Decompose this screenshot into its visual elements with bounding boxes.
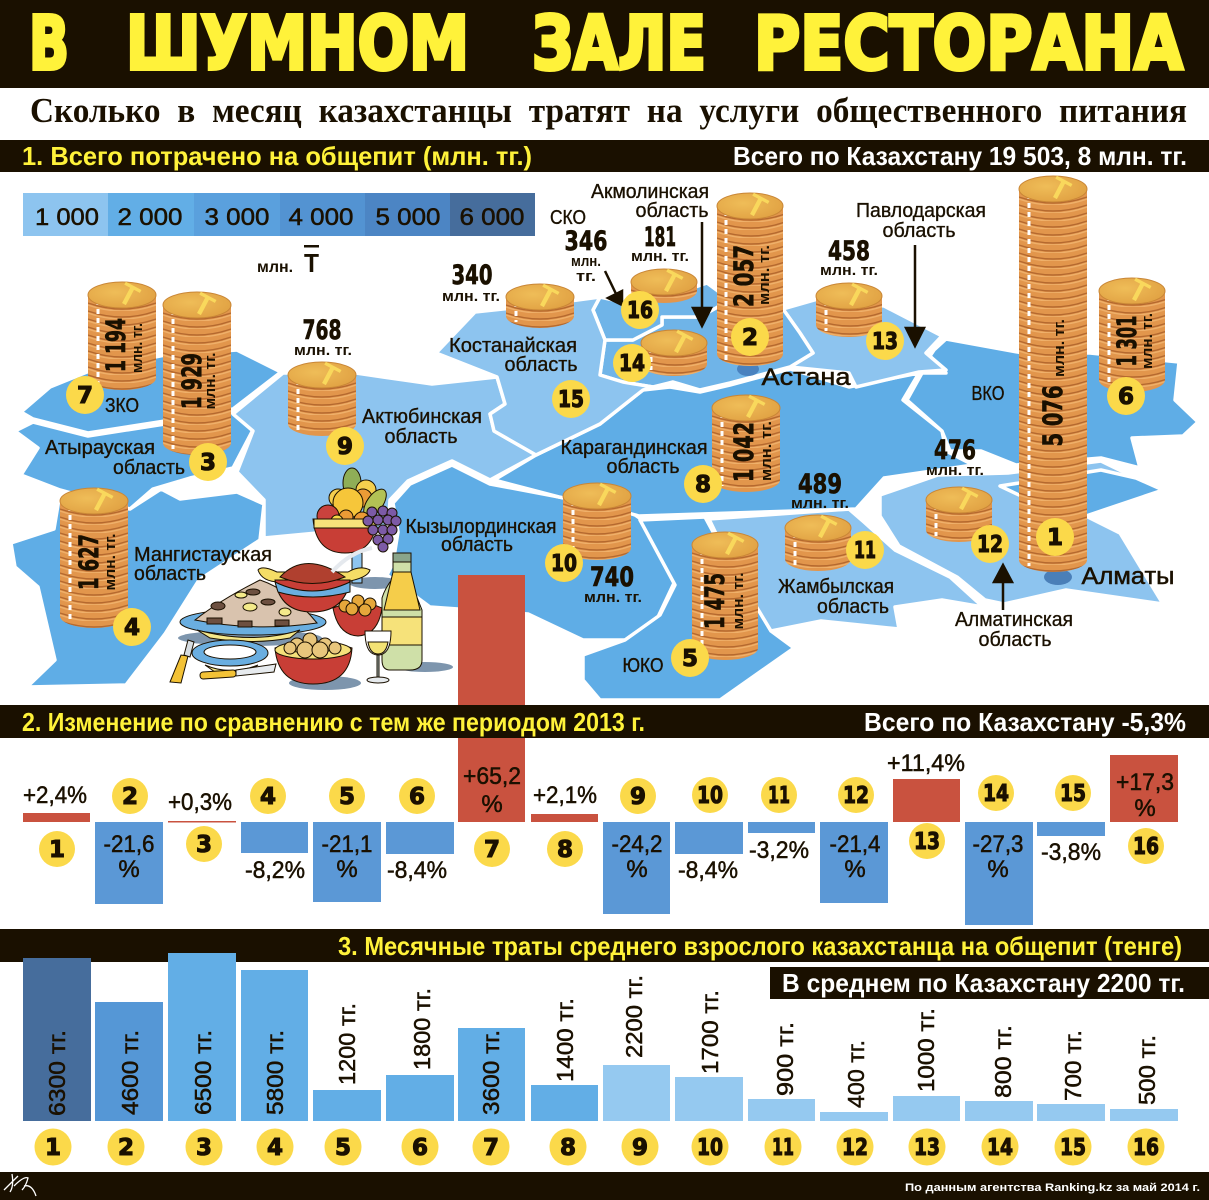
change bar chart: -24,2 (612, 831, 662, 858)
map value labels: млн. (571, 253, 601, 270)
coin stack 5 (692, 527, 758, 660)
region names: область (636, 200, 708, 222)
spending bar chart: 1800 тг. (409, 988, 435, 1070)
change bar chart: 16 (1133, 834, 1159, 860)
coin stack 6: 1 301 (1112, 315, 1143, 367)
coin stack 2: млн. тг. (756, 245, 773, 305)
coin stack 8 (712, 390, 780, 492)
coin stack 4 (60, 483, 128, 628)
spending bar chart: 6500 тг. (190, 1030, 216, 1115)
change bar chart: -8,2% (245, 857, 305, 884)
spending bar chart: 5800 тг. (262, 1030, 288, 1115)
legend scale: 6 000 (460, 204, 524, 231)
change bar chart: 10 (697, 783, 723, 809)
region names: Алматинская (955, 609, 1073, 631)
map number badges: 11 (854, 538, 876, 564)
change bar chart: 6 (409, 784, 425, 810)
bar 7 extension above section 2 band (458, 575, 525, 707)
section 1 heading: 1. Всего потрачено на общепит (млн. тг.) (22, 141, 532, 171)
map value labels: 768 (302, 315, 342, 346)
map number badges: 7 (77, 383, 93, 409)
coin stack 7: Т (113, 277, 144, 314)
section 1 total: Всего по Казахстану 19 503, 8 млн. тг. (733, 141, 1187, 171)
region names: Актюбинская (362, 406, 482, 428)
change bar chart: 13 (914, 829, 940, 855)
map number badges: 16 (627, 298, 653, 324)
map number badges: 8 (695, 472, 711, 498)
map value labels: млн. тг. (926, 462, 984, 479)
coin stack 7 (88, 277, 156, 390)
map number badges: 15 (558, 387, 584, 413)
coin stack 13 (816, 278, 882, 337)
map value labels: 346 (564, 226, 608, 257)
map number badges: 6 (1118, 384, 1134, 410)
coin stack 1: млн. тг. (1051, 319, 1068, 377)
change bar chart: -21,4 (830, 831, 880, 858)
change bar chart: % (118, 856, 140, 883)
spending bar chart: 800 тг. (990, 1025, 1016, 1098)
coin stack 1: Т (1044, 171, 1075, 208)
map value labels: тг. (576, 268, 596, 285)
arrow: Pavlodar region (906, 245, 924, 346)
spending bar chart: 900 тг. (772, 1022, 798, 1096)
region names: область (882, 220, 956, 242)
coin stack 6: млн. тг. (1139, 313, 1156, 369)
change bar chart: +2,1% (533, 782, 597, 809)
section 3 number badges: 16 (1133, 1135, 1159, 1161)
section 3 number badges: 8 (560, 1135, 576, 1161)
coin stack 11: Т (809, 510, 840, 547)
coin stack 9 (288, 357, 356, 436)
region names: Мангистауская (134, 544, 272, 566)
change bar chart: -27,3 (972, 831, 1024, 858)
map number badges: 3 (200, 450, 216, 476)
change bar chart: 1 (49, 837, 65, 863)
section 3 number badges: 10 (697, 1135, 723, 1161)
coin stack 14: Т (665, 325, 696, 362)
map number badges: 5 (682, 646, 698, 672)
title: В (29, 1, 69, 87)
change bar chart: 15 (1060, 781, 1086, 807)
region names: область (504, 354, 578, 376)
section 3 number badges: 2 (118, 1135, 134, 1161)
change bar chart: % (626, 856, 648, 883)
section 3 number badges: 14 (987, 1135, 1013, 1161)
section 3 number badges: 9 (632, 1135, 648, 1161)
map number badges (66, 291, 1145, 677)
map number badges: 2 (742, 325, 758, 351)
change bar chart: 8 (557, 837, 573, 863)
coin stack 4: млн. тг. (102, 534, 119, 590)
coin stack 13: Т (840, 278, 871, 315)
coin stack 6 (1099, 273, 1165, 392)
map number badges: 14 (619, 351, 645, 377)
region names: область (978, 629, 1052, 651)
change bar chart (23, 738, 1178, 925)
change bar chart: 9 (630, 784, 646, 810)
change bar chart: -21,1 (322, 831, 372, 858)
coin stack 14 (641, 325, 707, 376)
change bar chart: 4 (260, 784, 276, 810)
change bar chart: % (987, 856, 1009, 883)
region names: область (606, 456, 680, 478)
map value labels: млн. тг. (820, 262, 878, 279)
coin stack 16 (631, 264, 697, 303)
coin stack 2: 2 057 (729, 245, 760, 307)
spending bar chart: 500 тг. (1134, 1035, 1160, 1105)
section 3 number badges: 7 (483, 1135, 499, 1161)
region names: СКО (550, 207, 586, 229)
change bar chart: -8,4% (678, 857, 738, 884)
change bar chart: -8,4% (387, 857, 447, 884)
change bar chart: % (844, 856, 866, 883)
region names: Алматы (1082, 563, 1174, 590)
coin stack 5: 1 475 (700, 573, 731, 629)
map of Kazakhstan (11, 283, 1198, 700)
coin stack 12: Т (950, 482, 981, 519)
legend unit (257, 245, 319, 278)
coin stack 6: Т (1123, 273, 1154, 310)
map number badges: 12 (977, 532, 1003, 558)
section 3 number badges: 3 (196, 1135, 212, 1161)
title band (0, 0, 1209, 88)
coin stack 4: Т (85, 483, 116, 520)
map number badges: 1 (1047, 525, 1063, 551)
illustration: food (170, 468, 453, 690)
region names (45, 181, 1174, 677)
Astana marker (737, 362, 759, 376)
section 3 number badges: 12 (842, 1135, 868, 1161)
change bar chart: 3 (196, 832, 212, 858)
title: ЗАЛЕ (532, 1, 706, 87)
section 3 number badges: 15 (1060, 1135, 1086, 1161)
region names: Атырауская (45, 437, 155, 459)
change bar chart: -3,2% (749, 837, 809, 864)
coin stack 3 (163, 287, 231, 455)
legend unit: Т (304, 248, 319, 278)
source note: По данным агентства Ranking.kz за май 2014 г. (905, 1182, 1200, 1194)
section 3 number badges: 13 (914, 1135, 940, 1161)
coin stack 7: 1 194 (101, 318, 132, 372)
section 3 number badges: 11 (772, 1135, 794, 1161)
coin stack 10 (563, 478, 631, 560)
map value labels: млн. тг. (442, 288, 500, 305)
coin stack 11 (785, 510, 851, 571)
coin stack 2: Т (741, 188, 772, 225)
spending bar chart: 3600 тг. (478, 1030, 504, 1115)
legend scale: 5 000 (376, 204, 440, 231)
region names: Карагандинская (560, 437, 708, 459)
region names: Жамбылская (778, 576, 894, 598)
map value labels: млн. тг. (584, 589, 642, 606)
coin stack 8: млн. тг. (758, 421, 775, 481)
section 3 number badges: 4 (267, 1135, 283, 1161)
coin stack 8: 1 042 (729, 422, 760, 482)
region names: область (817, 596, 889, 618)
spending bar chart: 2200 тг. (621, 975, 647, 1058)
section 1 header band (0, 140, 1209, 172)
coin stack 3: Т (188, 287, 219, 324)
change bar chart: +17,3 (1116, 769, 1174, 796)
change bar chart: % (481, 791, 503, 818)
region names: Акмолинская (591, 181, 709, 203)
change bar chart: 5 (339, 784, 355, 810)
coin stack 3: млн. тг. (202, 352, 219, 410)
region names: ЗКО (105, 395, 139, 417)
legend scale: 3 000 (204, 204, 270, 231)
region names: Костанайская (449, 335, 577, 357)
map value labels (294, 222, 984, 606)
coin stack 10: Т (588, 478, 619, 515)
section 3 number badges (34, 1128, 1164, 1166)
spending bar chart: 1200 тг. (334, 1003, 360, 1085)
spending bar chart (23, 953, 1178, 1121)
legend scale: 2 000 (118, 204, 182, 231)
change bar chart: 2 (122, 784, 138, 810)
legend scale: 4 000 (288, 204, 354, 231)
arrow: Akmola region (693, 222, 711, 326)
section 3 number badges: 1 (45, 1135, 61, 1161)
region names: область (113, 457, 185, 479)
region names: область (441, 534, 513, 556)
map number badges: 9 (337, 434, 353, 460)
title: ШУМНОМ (126, 1, 469, 87)
footer band (0, 1172, 1209, 1200)
spending bar chart: 4600 тг. (117, 1030, 143, 1115)
change bar chart: +2,4% (23, 782, 87, 809)
coin stack 3: 1 929 (177, 353, 208, 409)
map value labels: 181 (644, 222, 676, 253)
change bar chart: -21,6 (104, 831, 154, 858)
region names: Кызылординская (406, 516, 556, 538)
map value labels: 476 (934, 435, 976, 466)
coin stack 15: Т (531, 279, 562, 316)
map number badges: 4 (124, 615, 140, 641)
section 2 total: Всего по Казахстану -5,3% (864, 707, 1186, 737)
legend scale: 1 000 (35, 204, 99, 231)
coin stack 1 (1019, 171, 1087, 572)
coin stack 15 (506, 279, 574, 328)
region names: Павлодарская (856, 200, 986, 222)
coin stack 8: Т (737, 390, 768, 427)
spending bar chart: 400 тг. (843, 1040, 869, 1108)
map number badges: 13 (872, 329, 898, 355)
region names: ВКО (972, 383, 1004, 405)
coin stack 5: млн. тг. (730, 572, 747, 630)
change bar chart: 11 (768, 783, 790, 809)
coin stack 9: Т (313, 357, 344, 394)
change bar chart: % (1134, 795, 1156, 822)
coin stack 1: 5 076 (1038, 386, 1069, 446)
coin stack 5: Т (716, 527, 747, 564)
map number badges: 10 (551, 551, 577, 577)
map value labels: 340 (452, 260, 492, 291)
region names: Астана (762, 364, 851, 391)
arrow: Almaty region (994, 565, 1012, 610)
region names: область (384, 426, 458, 448)
legend unit: млн. (257, 259, 293, 276)
change bar chart: -3,8% (1041, 839, 1101, 866)
section 2 header band (0, 705, 1209, 738)
map value labels: 740 (590, 562, 634, 593)
section 3 number badges: 6 (412, 1135, 428, 1161)
region names: область (134, 563, 206, 585)
artist signature (4, 1174, 36, 1196)
coin stack 16: Т (655, 264, 686, 301)
coin stack 7: млн. тг. (129, 323, 146, 373)
change bar chart: 14 (983, 781, 1009, 807)
spending bar chart: 1000 тг. (913, 1008, 939, 1092)
coin stack 12 (926, 482, 992, 542)
change bar chart: +65,2 (463, 763, 521, 790)
spending bar chart: 1700 тг. (697, 990, 723, 1074)
change bar chart: 7 (484, 837, 500, 863)
map value labels: 458 (828, 236, 870, 267)
coin stack 2 (717, 188, 783, 366)
section 3 header band (0, 929, 1209, 962)
legend scale (23, 193, 535, 236)
title (29, 1, 1183, 87)
map value labels: млн. тг. (791, 495, 849, 512)
map value labels: 489 (798, 469, 842, 500)
spending bar chart: 700 тг. (1060, 1030, 1086, 1101)
section 2 heading: 2. Изменение по сравнению с тем же периодом 2013 г. (22, 707, 645, 737)
arrow: SKO region (605, 271, 622, 305)
coin stack 4: 1 627 (74, 534, 105, 590)
section 3 number badges: 5 (335, 1135, 351, 1161)
spending bar chart: 6300 тг. (44, 1030, 70, 1116)
section 3 average box: В среднем по Казахстану 2200 тг. (782, 968, 1185, 998)
spending bar chart: 1400 тг. (552, 998, 578, 1082)
change bar chart: +11,4% (887, 750, 965, 777)
region names: ЮКО (622, 655, 664, 677)
map value labels: млн. тг. (631, 248, 689, 265)
change bar chart: 12 (843, 783, 869, 809)
change bar chart: % (336, 856, 358, 883)
Almaty marker (1044, 569, 1072, 585)
map value labels: млн. тг. (294, 342, 352, 359)
change bar chart: +0,3% (168, 789, 232, 816)
